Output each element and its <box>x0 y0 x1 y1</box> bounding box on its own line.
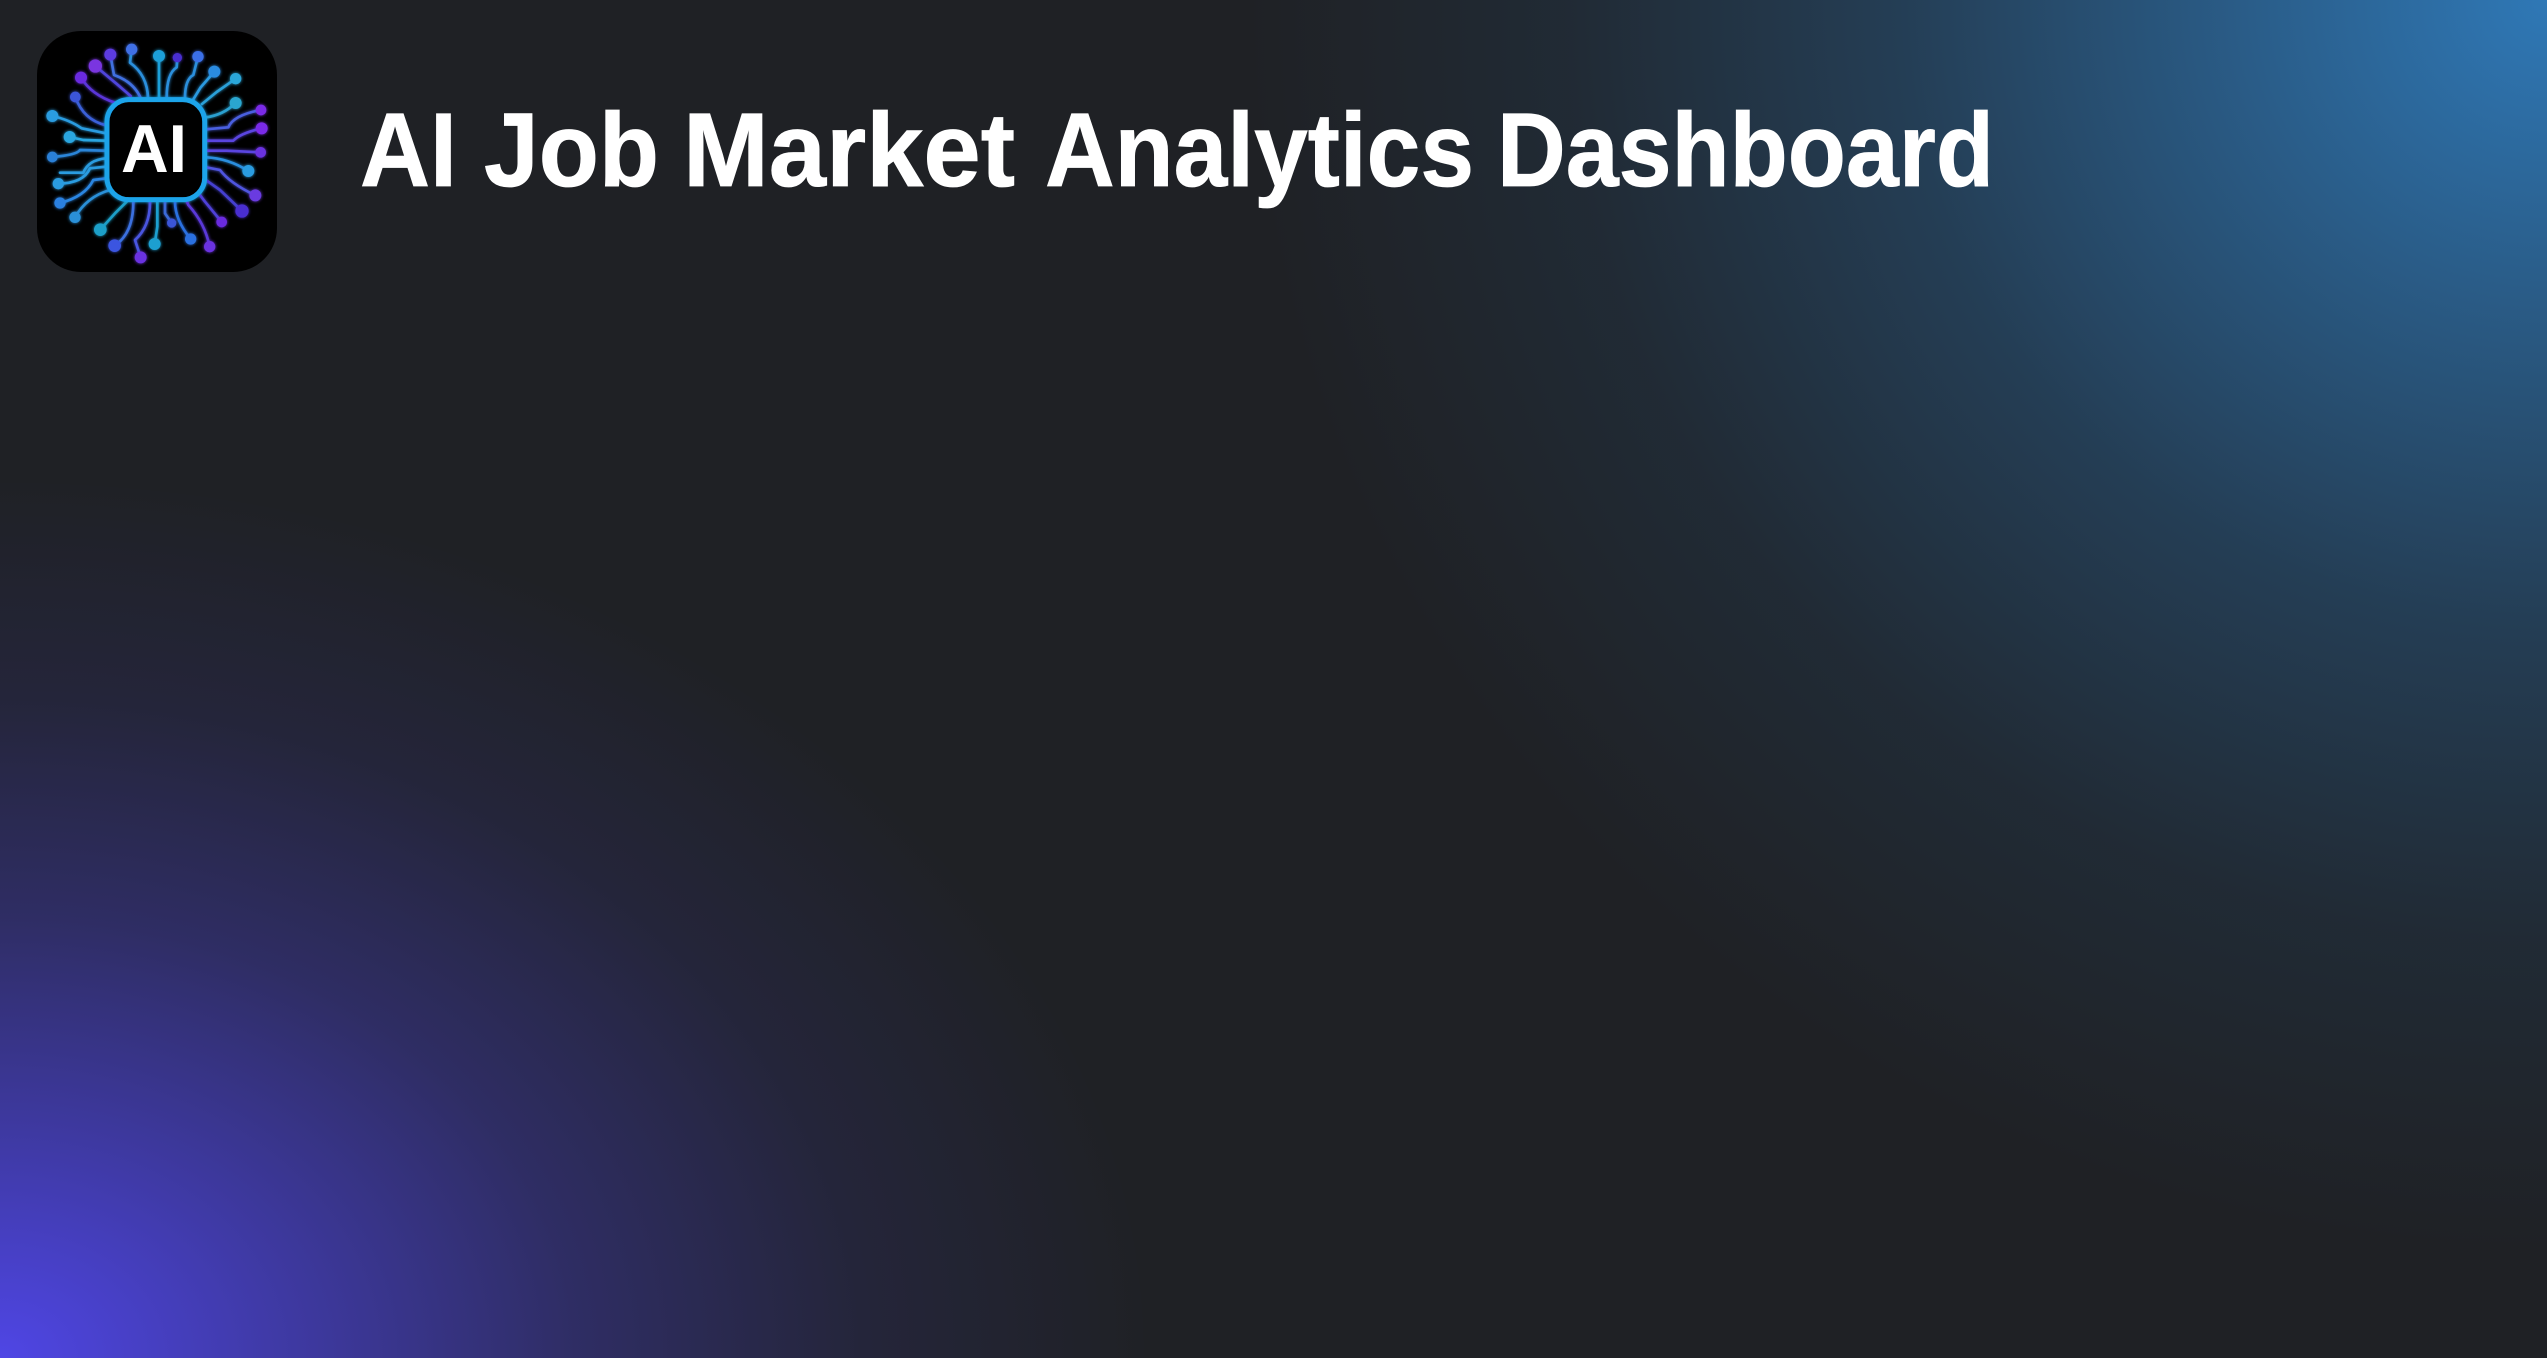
title: Job <box>484 92 659 209</box>
icon: AI chip logo <box>37 31 277 272</box>
title: Market <box>683 92 1015 209</box>
title <box>360 92 1994 209</box>
title: AI <box>360 92 457 209</box>
title: Dashboard <box>1497 92 1994 209</box>
title: Analytics <box>1045 92 1474 209</box>
icon: AI chip logo: AI <box>121 111 187 187</box>
